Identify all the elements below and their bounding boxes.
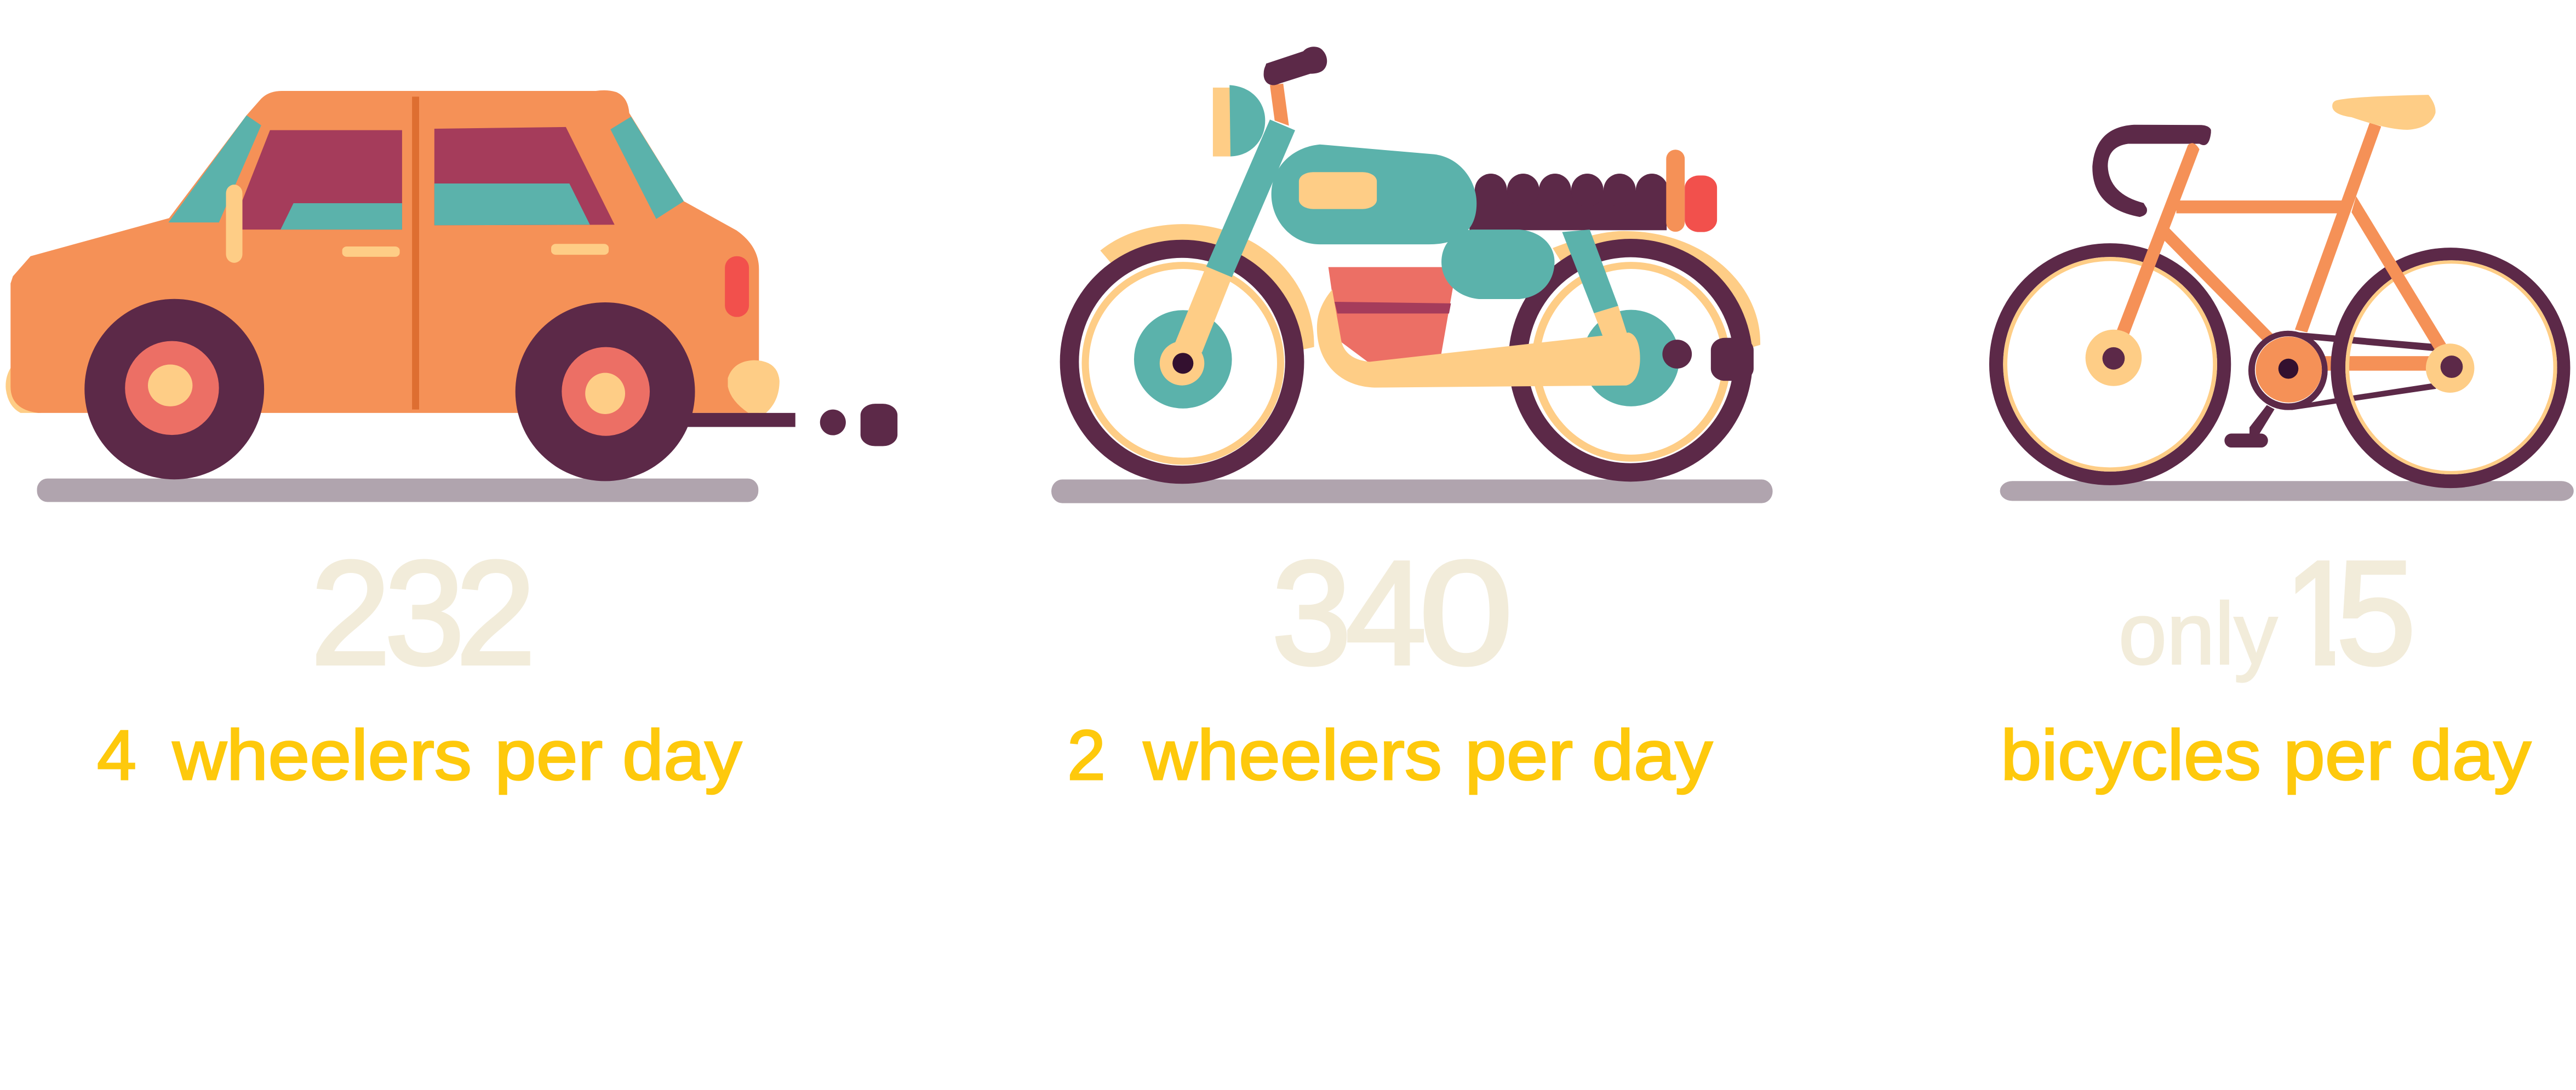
front rim	[2003, 257, 2217, 472]
label: bicycles per day: bicycles	[2001, 716, 2261, 795]
handlebar	[2092, 125, 2211, 217]
rear axle	[2441, 355, 2463, 378]
rear pillar glass	[610, 117, 684, 219]
exhaust puff large	[861, 404, 897, 446]
fuel tank	[1272, 145, 1476, 244]
rear fender	[1553, 231, 1760, 348]
front window glass	[281, 203, 402, 230]
tail hub	[1662, 340, 1692, 369]
handlebar	[1264, 47, 1327, 85]
stat: only 15: 5	[2336, 531, 2416, 696]
front window	[242, 130, 402, 230]
front door handle	[342, 246, 400, 257]
crank arm	[2249, 405, 2275, 434]
stat: only 15: 1	[2285, 531, 2356, 696]
illustration: car	[5, 90, 897, 502]
rear wheel	[516, 302, 695, 481]
rear wheel	[1508, 239, 1753, 481]
engine	[1329, 267, 1453, 363]
front wheel	[1989, 243, 2231, 485]
label: bicycles per day	[2001, 716, 2532, 795]
label: 2 wheelers per day: day	[1592, 716, 1713, 795]
front fork	[2110, 143, 2200, 352]
tail light	[1685, 175, 1717, 232]
side cover	[1441, 230, 1554, 299]
rear bumper	[728, 360, 780, 413]
swing arm	[1317, 290, 1640, 388]
front bumper	[5, 368, 41, 413]
exhaust puff small	[820, 410, 846, 435]
down tube	[2164, 228, 2272, 341]
ground: bicycle	[2000, 481, 2574, 501]
chain	[2280, 332, 2436, 410]
handlebar stem	[1270, 84, 1289, 125]
saddle	[2332, 95, 2436, 130]
engine strip	[1335, 302, 1451, 313]
label: 4 wheelers per day: 4	[97, 716, 136, 795]
rear wheel	[2331, 248, 2570, 488]
front axle	[1172, 353, 1193, 374]
front wheel	[84, 299, 264, 479]
seat stay	[2351, 196, 2447, 349]
chainring	[2248, 331, 2328, 410]
car body	[10, 90, 759, 413]
fork lower	[1175, 269, 1232, 353]
stat: 340: 0	[1419, 531, 1513, 696]
label: bicycles per day: day	[2411, 716, 2532, 795]
front hub	[2086, 330, 2142, 386]
rear window glass	[434, 183, 590, 225]
headlight	[1229, 85, 1265, 157]
stat: only 15	[2121, 560, 2412, 683]
rear window	[434, 127, 615, 225]
label: 4 wheelers per day: per	[495, 716, 603, 795]
shock upper	[1562, 230, 1618, 313]
illustration: bicycle	[1989, 95, 2574, 501]
seat tube	[2295, 123, 2381, 332]
label: 2 wheelers per day	[1067, 716, 1713, 795]
headlight mount	[1213, 88, 1230, 157]
chain stay	[2325, 356, 2432, 371]
seat	[1469, 174, 1668, 230]
rear rim	[2345, 260, 2557, 474]
illustration: motorcycle	[1051, 47, 1773, 503]
stat: 340: 4	[1346, 531, 1427, 696]
side mirror	[226, 185, 242, 263]
label: bicycles per day: per	[2283, 716, 2391, 795]
stat: 232: 2	[311, 531, 391, 696]
label: 4 wheelers per day	[97, 716, 742, 795]
top tube	[2176, 200, 2344, 213]
rear strut	[1666, 150, 1685, 232]
ground: car	[37, 479, 758, 502]
door line	[412, 96, 419, 410]
tank badge	[1299, 172, 1377, 209]
front hub	[1160, 341, 1204, 386]
shock lower	[1594, 306, 1628, 336]
label: 4 wheelers per day: wheelers	[172, 716, 472, 795]
exhaust pipe	[687, 413, 795, 427]
label: 2 wheelers per day: wheelers	[1143, 716, 1442, 795]
rear hub	[2426, 343, 2474, 393]
ground: motorcycle	[1051, 479, 1773, 503]
stat: 232: 3	[385, 531, 465, 696]
stat: only 15: only	[2119, 584, 2277, 682]
tail light	[725, 256, 749, 317]
front axle	[2103, 347, 2125, 370]
stat: 340: 3	[1272, 531, 1352, 696]
stat: 232	[311, 531, 536, 696]
windshield	[168, 115, 261, 222]
pedal	[2224, 434, 2268, 448]
stat: 340	[1272, 531, 1513, 696]
front fender	[1100, 224, 1314, 349]
label: 4 wheelers per day: day	[622, 716, 742, 795]
rear tail block	[1711, 338, 1754, 381]
label: 2 wheelers per day: 2	[1067, 716, 1106, 795]
rear door handle	[551, 244, 609, 255]
fork upper	[1206, 119, 1295, 277]
label: 2 wheelers per day: per	[1465, 716, 1573, 795]
front wheel	[1060, 240, 1304, 484]
stat: 232: 2	[456, 531, 536, 696]
